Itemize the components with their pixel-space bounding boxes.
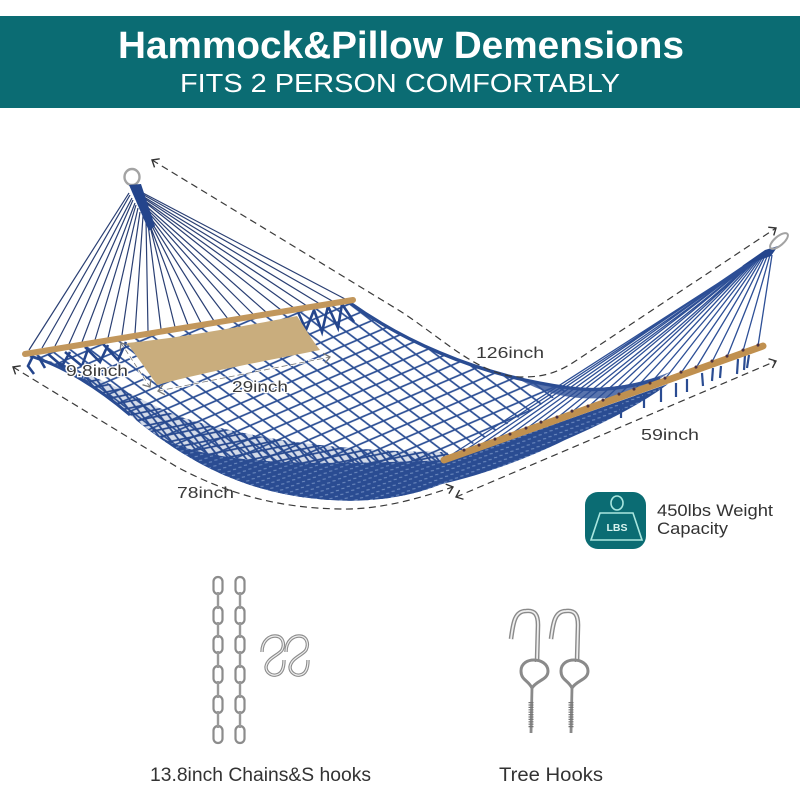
left ring <box>124 169 140 185</box>
dimension: 9.8inch pillow depth <box>66 343 150 387</box>
dimension: 126inch <box>152 160 776 377</box>
right ring <box>768 230 790 252</box>
label: chains and S hooks: 13.8inch Chains&S hooks <box>150 765 371 786</box>
left wooden spreader bar <box>25 300 353 354</box>
pillow <box>127 316 320 385</box>
left fringe knots <box>28 304 354 374</box>
right suspension strings <box>448 254 772 457</box>
left suspension strings <box>29 193 347 350</box>
icon: weight <box>591 496 642 540</box>
open diamond mesh <box>36 304 565 501</box>
far-end net shading <box>520 372 670 398</box>
header banner <box>0 16 800 108</box>
icon: tree hook left <box>511 611 548 733</box>
dimension: 59inch <box>456 361 776 497</box>
dense fabric band <box>60 362 448 505</box>
dimension: 78inch: 78inch <box>177 485 234 502</box>
right wooden spreader bar <box>444 346 763 460</box>
label: tree hooks: Tree Hooks <box>499 765 603 786</box>
left knot <box>129 184 155 231</box>
hammock net <box>36 304 565 501</box>
dimension: 29inch pillow width: 29inch <box>232 379 288 396</box>
weight capacity text <box>657 501 773 538</box>
dimension: 126inch: 126inch <box>476 345 544 362</box>
hammock illustration <box>20 169 790 510</box>
title: Hammock&Pillow Demensions <box>118 25 684 67</box>
icon: tree hook right <box>551 611 588 733</box>
right knot <box>742 246 778 266</box>
net upper edge cord <box>350 303 660 390</box>
net lower-left edge cord <box>30 356 130 415</box>
dimension: 78inch <box>13 367 453 509</box>
weight capacity text: 450lbs Weight <box>657 501 773 520</box>
icon: two S hooks <box>262 636 308 675</box>
weight capacity badge: LBS <box>606 522 628 534</box>
right fabric band <box>442 384 668 484</box>
dimension: 59inch: 59inch <box>641 427 699 444</box>
dimension: 29inch pillow width <box>158 357 330 396</box>
subtitle: FITS 2 PERSON COMFORTABLY <box>180 68 620 98</box>
denser mesh towards lower edge <box>30 356 448 500</box>
bar lacing dots <box>464 345 758 450</box>
right fringe <box>621 355 749 418</box>
dimension: 9.8inch pillow depth: 9.8inch <box>66 363 128 380</box>
weight capacity text: Capacity <box>657 519 729 538</box>
weight capacity badge <box>585 492 646 549</box>
icon: two chains <box>214 577 244 743</box>
